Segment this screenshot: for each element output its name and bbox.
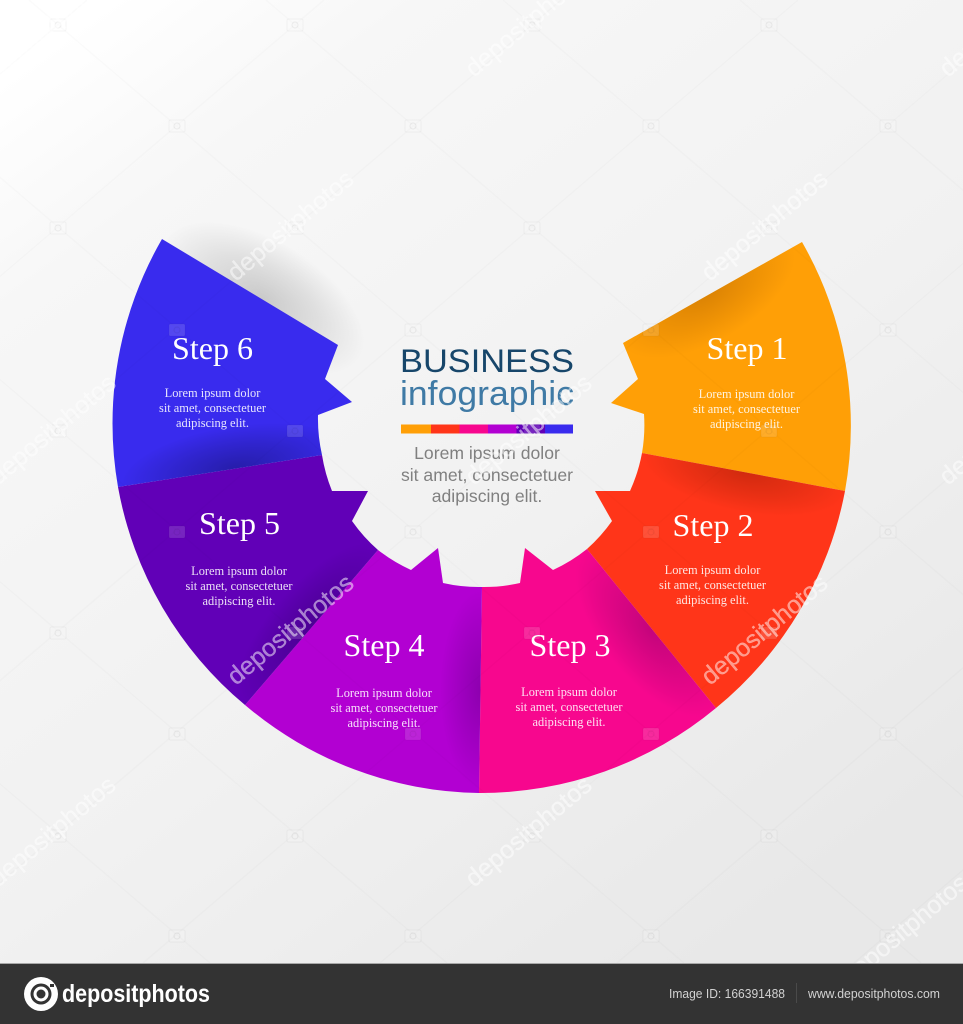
text: step 4 description: adipiscing elit. [348,716,420,730]
text: step 6 description: Lorem ipsum dolor [165,386,261,400]
shading: step 4 right edge [449,611,482,768]
shading: step 3 right edge [587,561,708,704]
website: www.depositphotos.com [807,987,940,1001]
title: infographic [400,375,574,413]
heading: step 1: Step 1 [707,330,787,366]
image id: Image ID: 166391488 [669,987,785,1001]
colour bar [401,424,573,434]
text: step 1 description: adipiscing elit. [710,417,783,431]
watermark pattern: depositphotos [222,569,359,691]
text: step 4 description: sit amet, consectetuer [330,701,438,715]
text: step 1 description: Lorem ipsum dolor [699,387,795,401]
shading: step 2 top edge [659,456,830,508]
watermark pattern: depositphotos [696,165,833,287]
text: step 2 description: sit amet, consectetuer [659,578,767,592]
text: step 5 description: adipiscing elit. [203,594,275,608]
text: step 5 description: Lorem ipsum dolor [191,564,288,578]
panel: step 6 [112,239,352,487]
heading: step 6: Step 6 [172,330,253,366]
text: step 3 description: sit amet, consectetuer [516,700,623,714]
panel: step 1 [611,242,851,491]
shading: step 1 top edge [639,258,776,344]
panel: step 4 [245,548,482,793]
text: step 5 description: sit amet, consectetuer [186,579,293,593]
icon: camera logo [24,977,58,1011]
watermark pattern: depositphotos [222,165,359,287]
step 6 cast shadow on background [134,189,390,407]
text: step 6 description: adipiscing elit. [176,416,249,430]
text: step 2 description: Lorem ipsum dolor [665,563,761,577]
text: step 3 description: Lorem ipsum dolor [521,685,618,699]
logo wordmark: depositphotos [62,980,210,1008]
heading: step 2: Step 2 [673,507,753,543]
text: step 1 description: sit amet, consectetuer [693,402,801,416]
title: BUSINESS [400,343,574,379]
title [400,343,574,413]
panel: step 3 [479,548,716,793]
heading: step 3: Step 3 [530,627,610,663]
watermark pattern: depositphotos [696,569,833,691]
heading: step 5: Step 5 [199,505,280,541]
watermark pattern: depositphotos [460,771,597,893]
centre paragraph: adipiscing elit. [432,486,542,506]
text: step 2 description: adipiscing elit. [676,593,749,607]
heading: step 4: Step 4 [344,627,424,663]
panel: step 5 [118,455,378,705]
footer bar [0,963,963,1024]
centre paragraph: Lorem ipsum dolor [414,443,560,463]
text: step 4 description: Lorem ipsum dolor [336,686,433,700]
shading: step 6 bottom edge [135,428,322,484]
shading: step 5 lower edge [253,562,364,688]
panel: step 2 [587,453,845,708]
centre paragraph: sit amet, consectetuer [401,465,573,485]
watermark pattern: depositphotos [460,369,597,491]
text: step 3 description: adipiscing elit. [533,715,605,729]
text: step 6 description: sit amet, consectetuer [159,401,267,415]
